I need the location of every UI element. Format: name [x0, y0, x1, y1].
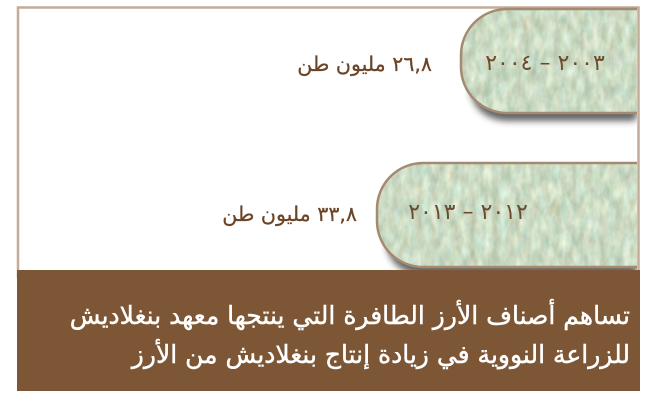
- text: 26.8 million tons: ٢٦,٨ مليون طن: [297, 52, 432, 76]
- caption: line 2: للزراعة النووية في زيادة إنتاج بنغلاديش من الأرز: [130, 338, 630, 370]
- panel: frame: [18, 8, 638, 278]
- pill: 2012-2013: [377, 163, 637, 275]
- pill: 2003-2004: [461, 9, 637, 121]
- panel: bottom caption band: [17, 270, 640, 391]
- label: year range: ٢٠٠٣ – ٢٠٠٤: [485, 51, 605, 76]
- label: year range: ٢٠١٢ – ٢٠١٣: [408, 200, 528, 225]
- caption: line 1: تساهم أصناف الأرز الطافرة التي ينتجها معهد بنغلاديش: [70, 298, 630, 331]
- text: 33.8 million tons: ٣٣,٨ مليون طن: [222, 202, 357, 226]
